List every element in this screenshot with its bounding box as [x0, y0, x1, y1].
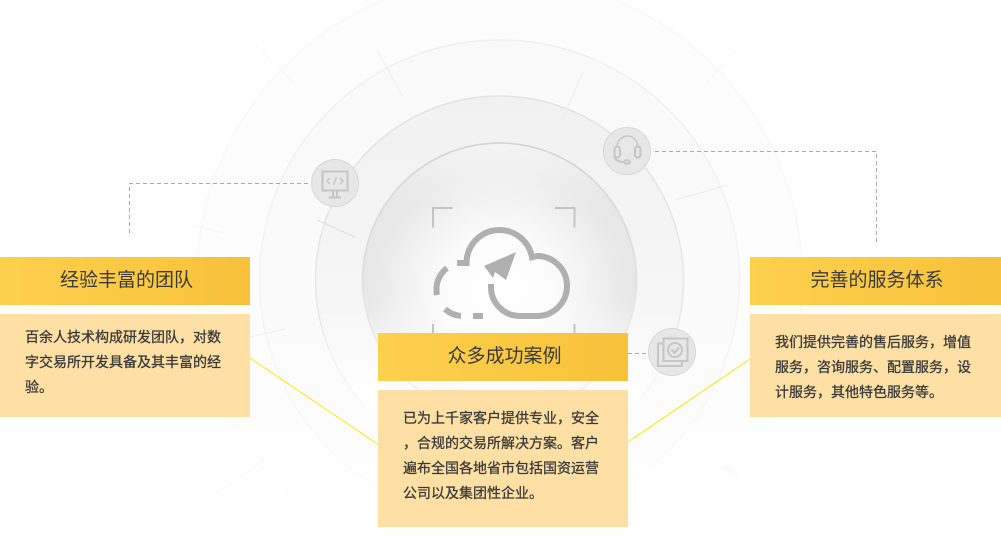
- text: cases: [403, 410, 599, 501]
- focus brackets: [433, 208, 574, 340]
- heading: service: [750, 257, 1001, 305]
- text: service: 计服务，其他特色服务等。: [775, 384, 943, 400]
- icon: headset: [604, 128, 650, 174]
- heading: cases: 众多成功案例: [447, 346, 562, 367]
- cloud icon with paper plane: [436, 230, 567, 316]
- panel body: cases: [378, 390, 628, 527]
- text: team: 百余人技术构成研发团队，对数: [25, 329, 221, 345]
- panel body: service: [750, 314, 1001, 417]
- panel: experienced team: [0, 257, 250, 417]
- inner circle: [362, 143, 636, 417]
- heading: cases: [378, 333, 628, 381]
- third ring: [260, 40, 740, 520]
- heading: team: 经验丰富的团队: [60, 270, 193, 291]
- icon: stacked documents with check: [648, 328, 696, 376]
- dashed connector: cases: [628, 352, 648, 354]
- radial tick marks: [193, 45, 747, 493]
- yellow connector right: [628, 359, 750, 442]
- dashed connector: team: [130, 184, 311, 233]
- text: cases: ，合规的交易所解决方案。客户: [403, 435, 599, 451]
- yellow connector left: [250, 358, 379, 445]
- text: team: 验。: [25, 379, 53, 395]
- second ring: [316, 96, 684, 464]
- panel: service system: [750, 257, 1001, 417]
- text: cases: 已为上千家客户提供专业，安全: [403, 410, 599, 426]
- text: service: 服务，咨询服务、配置服务，设: [775, 359, 971, 375]
- text: cases: 遍布全国各地省市包括国资运营: [403, 460, 599, 476]
- heading: service: 完善的服务体系: [810, 270, 944, 291]
- icon: code monitor: [312, 160, 358, 206]
- outer ring: [196, 0, 802, 559]
- heading: team: [0, 257, 250, 305]
- text: team: [25, 329, 221, 395]
- dashed connector: service: [655, 152, 876, 243]
- panel body: team: [0, 314, 250, 417]
- panel: success cases: [378, 333, 628, 527]
- text: team: 字交易所开发具备及其丰富的经: [25, 354, 221, 370]
- inner circle highlight: [364, 144, 636, 416]
- text: service: [775, 334, 971, 400]
- text: cases: 公司以及集团性企业。: [403, 485, 543, 501]
- text: service: 我们提供完善的售后服务，增值: [775, 334, 971, 350]
